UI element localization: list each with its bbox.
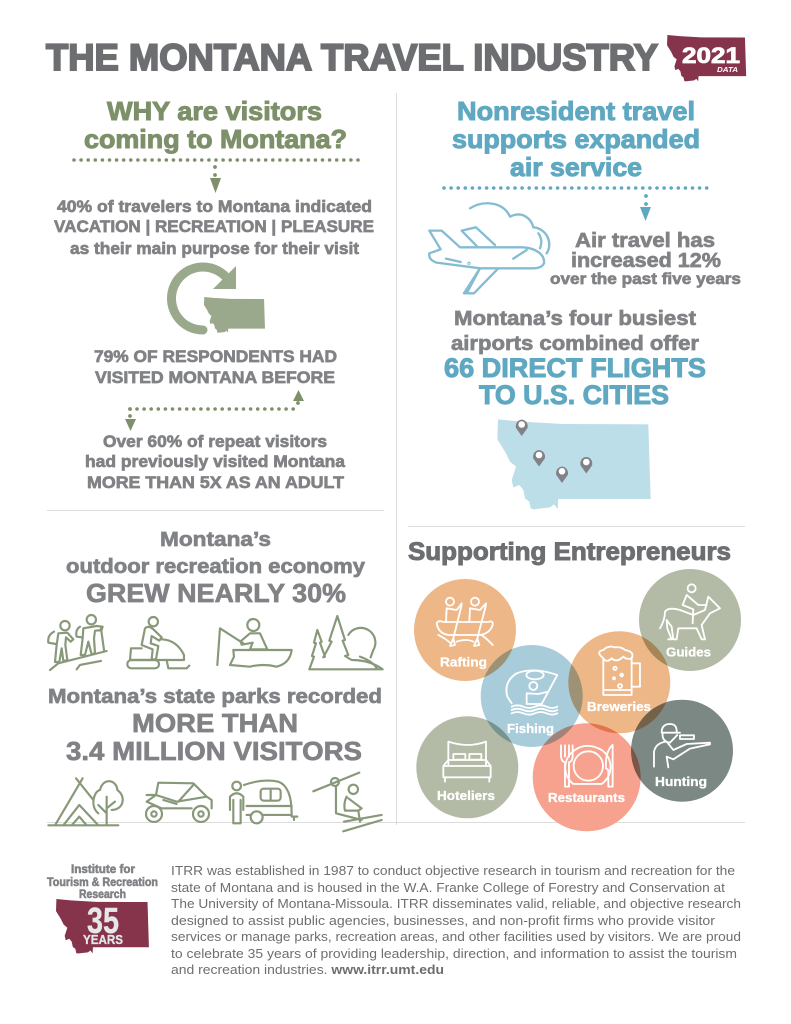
icon: trees and sun xyxy=(309,616,383,669)
panel: outdoor recreation xyxy=(48,529,383,831)
text: repeat visitors xyxy=(85,432,346,492)
text: state parks visitors: MORE THAN xyxy=(132,708,298,738)
icon: tent and tree xyxy=(48,778,123,825)
text: 66 direct flights: 66 DIRECT FLIGHTS xyxy=(444,353,706,383)
text: repeat visitors: MORE THAN 5X AS AN ADULT xyxy=(87,473,345,492)
chart: entrepreneur circles xyxy=(414,569,741,831)
panel: air service xyxy=(429,96,741,509)
map: Montana with airport pins xyxy=(497,419,651,509)
text: purpose of visit: as their main purpose for their visit xyxy=(70,239,359,258)
footer: ITRR logo: 35 xyxy=(87,900,119,941)
icon: fly fishing xyxy=(506,670,557,715)
icon: fishing from boat xyxy=(217,619,292,667)
icon: hunter xyxy=(654,724,710,767)
text: 79 percent: VISITED MONTANA BEFORE xyxy=(95,368,335,387)
badge: 2021 data xyxy=(667,35,746,81)
icon row: recreation activities xyxy=(48,615,383,670)
heading: why are visitors: coming to Montana? xyxy=(84,124,347,154)
text: 79 percent xyxy=(94,347,337,387)
text: outdoor recreation economy: outdoor recreation economy xyxy=(66,556,366,578)
footer: ITRR logo: Tourism & Recreation xyxy=(47,875,158,889)
text: four busiest airports: Montana’s four busiest xyxy=(454,308,696,330)
footer: ITRR logo xyxy=(47,862,158,954)
heading: nonresident travel xyxy=(452,96,700,182)
text: four busiest airports xyxy=(451,308,699,355)
arrow: dotted connector xyxy=(125,390,304,431)
icon: horse rider xyxy=(660,584,720,639)
label: hunting: Hunting xyxy=(655,775,707,789)
text block: about ITRR xyxy=(171,863,741,977)
heading: nonresident travel: Nonresident travel xyxy=(457,96,695,126)
footer: ITRR logo: Research xyxy=(79,887,126,901)
text: outdoor recreation economy: Montana’s xyxy=(160,529,271,551)
icon: person and camper xyxy=(230,781,297,823)
heading: supporting entrepreneurs: Supporting Entrepreneurs xyxy=(408,538,731,566)
label: rafting: Rafting xyxy=(440,656,487,670)
icon: return arrow with Montana xyxy=(171,266,265,333)
heading: nonresident travel: supports expanded xyxy=(452,124,700,154)
footer: ITRR logo: YEARS xyxy=(83,932,123,947)
icon: utility vehicle xyxy=(146,783,212,822)
text block: about ITRR: services or manage parks, recreation areas, and other facilities used by visitors. We are proud xyxy=(171,929,741,944)
label: guides: Guides xyxy=(666,646,711,660)
text block: about ITRR: designed to assist public agencies, businesses, and non-profit firms who provide visitor xyxy=(171,913,716,928)
badge: 2021 data: DATA xyxy=(717,67,738,74)
text: outdoor recreation economy xyxy=(66,529,366,608)
icon: ski lift xyxy=(313,773,382,831)
icon: rafting xyxy=(437,598,493,646)
title: THE MONTANA TRAVEL INDUSTRY xyxy=(46,37,658,78)
arrow: dotted down xyxy=(74,160,358,193)
text block: about ITRR: state of Montana and is housed in the W.A. Franke College of Forestry and Conservation at xyxy=(171,880,725,895)
text: state parks visitors: 3.4 MILLION VISITORS xyxy=(66,736,362,766)
text block: about ITRR: ITRR was established in 1987 to conduct objective research in tourism and recreation for the xyxy=(171,863,735,878)
text: 66 direct flights: TO U.S. CITIES xyxy=(479,380,669,410)
text block: about ITRR: and recreation industries. www.itrr.umt.edu xyxy=(171,962,444,977)
label: breweries: Breweries xyxy=(587,700,651,714)
text block: about ITRR: The University of Montana-Missoula. ITRR disseminates valid, reliable, and objective research xyxy=(171,896,741,911)
icon: beer mug xyxy=(599,647,640,695)
icon: plate and cutlery xyxy=(561,745,613,787)
text: air travel increased: Air travel has xyxy=(575,230,715,252)
label: restaurants: Restaurants xyxy=(548,791,625,805)
icon: hikers xyxy=(48,615,107,670)
heading: why are visitors: WHY are visitors xyxy=(107,96,322,126)
text: repeat visitors: had previously visited Montana xyxy=(85,452,346,471)
badge: 2021 data: 2021 xyxy=(682,43,740,68)
text: 66 direct flights xyxy=(444,353,706,410)
arrow: dotted down blue xyxy=(444,188,710,221)
text: repeat visitors: Over 60% of repeat visitors xyxy=(103,432,327,451)
text: air travel increased: increased 12% xyxy=(571,250,721,272)
text: state parks visitors xyxy=(48,686,382,766)
label: hoteliers: Hoteliers xyxy=(437,789,495,803)
icon: snowmobile xyxy=(127,617,189,668)
text: purpose of visit: 40% of travelers to Montana indicated xyxy=(57,197,372,216)
heading: why are visitors xyxy=(84,96,347,154)
text: 79 percent: 79% OF RESPONDENTS HAD xyxy=(94,347,337,366)
text: state parks visitors: Montana’s state parks recorded xyxy=(48,686,382,708)
text: air travel increased: over the past five years xyxy=(550,271,741,288)
text: purpose of visit: VACATION | RECREATION | PLEASURE xyxy=(54,217,374,236)
icon: bed xyxy=(443,742,491,782)
heading: nonresident travel: air service xyxy=(510,152,642,182)
panel: why visitors xyxy=(54,96,374,492)
text: four busiest airports: airports combined offer xyxy=(451,333,699,355)
icon row: state park activities xyxy=(48,773,382,831)
text: air travel increased xyxy=(550,230,741,288)
text: purpose of visit xyxy=(54,197,374,258)
text: outdoor recreation economy: GREW NEARLY 30% xyxy=(86,578,346,608)
label: fishing: Fishing xyxy=(507,722,554,736)
footer: ITRR logo: Institute for xyxy=(71,862,135,876)
text block: about ITRR: to celebrate 35 years of providing leadership, direction, and information to assist the tourism xyxy=(171,946,737,961)
icon: plane and cloud xyxy=(429,203,549,293)
